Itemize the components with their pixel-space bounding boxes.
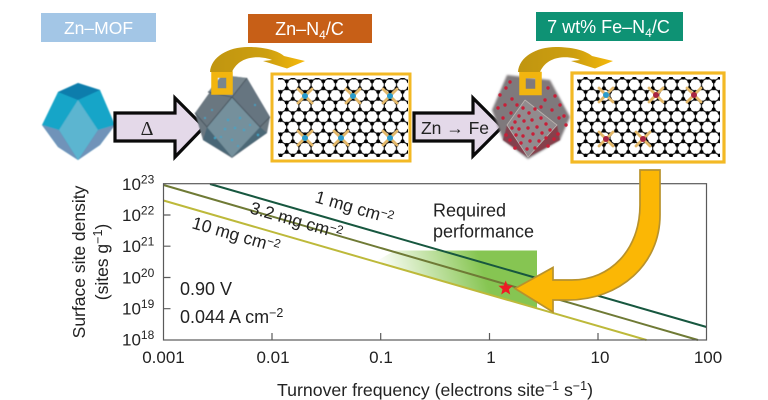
labels: x-axis ticks: 10 [591,348,609,367]
labels: x-axis ticks [142,348,722,367]
label: conditions: 0.044 A cm [180,307,269,327]
arrow: zoom to Fe-N4/C lattice [518,47,613,72]
label: x-axis title: s [559,380,573,400]
labels: x-axis ticks: 0.1 [369,348,393,367]
label: conditions [180,279,283,327]
labels: y-axis ticks: 10 [122,330,141,350]
arrow: Zn to Fe exchange [414,98,502,156]
arrow: zoom to Zn-N4/C lattice [210,47,305,72]
label: Zn-N4/C: Zn–N [275,19,319,39]
chart: 10 mg line [164,200,646,340]
chart: 1 mg line [210,184,706,327]
label: x-axis title: Turnover frequency (electrons site [277,380,545,400]
label: Zn to Fe: Zn → Fe [421,118,489,138]
labels: y-axis ticks: 18 [141,328,155,342]
labels: y-axis ticks: 10 [122,300,141,318]
labels: y-axis ticks: 10 [122,268,141,288]
label: Zn-N4/C [248,14,372,43]
label: Zn-N4/C: /C [326,19,344,39]
arrow: heating step [115,98,204,157]
icon: Zn-N4/C zoom square [214,74,230,92]
label: conditions: −2 [269,306,283,320]
icon: Zn-MOF polyhedron [42,83,115,160]
labels: y-axis ticks: 19 [141,297,155,311]
icon: Fe-N4/C zoom square [522,75,538,92]
label: delta: Δ [141,118,154,140]
label: y-axis title: −1 [91,230,105,244]
labels: y-axis ticks: 22 [141,204,155,218]
labels: y-axis ticks: 23 [141,172,155,186]
labels: y-axis ticks: 10 [122,175,141,194]
labels: y-axis ticks: 20 [141,266,155,280]
label: 7 wt% Fe-N4/C: 4 [645,26,652,40]
label: 10 mg loading: 10 mg cm [190,213,269,253]
label: x-axis title: −1 [545,379,559,393]
label: 3.2 mg loading: 3.2 mg cm [248,198,332,239]
chart: plot frame [164,184,706,340]
label: y-axis title [69,185,112,338]
labels: x-axis ticks: 1 [486,348,496,367]
label: 1 mg loading: 1 mg cm [313,187,383,224]
label: y-axis title: (sites g [92,244,112,300]
labels: x-axis ticks: 0.01 [256,348,290,367]
label: Zn-MOF: Zn–MOF [64,18,133,38]
label: Zn-MOF [41,13,156,42]
labels: y-axis ticks: 21 [141,234,155,248]
label: 7 wt% Fe-N4/C: 7 wt% Fe–N [547,17,645,37]
label: y-axis title: ) [92,224,112,230]
panel: Zn-N4/C lattice [272,74,410,161]
labels: y-axis ticks [122,172,155,350]
label: y-axis title: Surface site density [69,185,89,338]
icon: Zn-N4/C polyhedron [195,75,270,158]
labels: x-axis ticks: 0.001 [142,348,185,367]
label: required performance: performance [433,222,534,242]
label: conditions: 0.90 V [180,279,232,299]
arrow: large curved arrow to target [515,170,660,312]
chart: required performance band [375,250,537,308]
label: required performance [433,200,534,242]
icon: red star [498,280,513,294]
chart: site density vs turnover frequency [69,172,722,400]
chart: 3.2 mg line [164,185,698,340]
labels: y-axis ticks: 10 [122,237,141,256]
label: Zn-N4/C: 4 [319,28,326,42]
panel: Fe-N4/C lattice [572,73,724,162]
label: 7 wt% Fe-N4/C: /C [652,17,670,37]
label: x-axis title: ) [587,380,593,400]
label: 10 mg loading: −2 [265,234,283,251]
label: 7 wt% Fe-N4/C [536,12,683,41]
labels: x-axis ticks: 100 [694,348,722,367]
label: x-axis title: −1 [573,379,587,393]
icon: Fe-N4/C polyhedron [492,75,570,159]
label: 1 mg loading: −2 [379,205,396,222]
label: 3.2 mg loading: −2 [328,220,345,237]
labels: y-axis ticks: 10 [122,206,141,225]
label: required performance: Required [433,200,506,220]
